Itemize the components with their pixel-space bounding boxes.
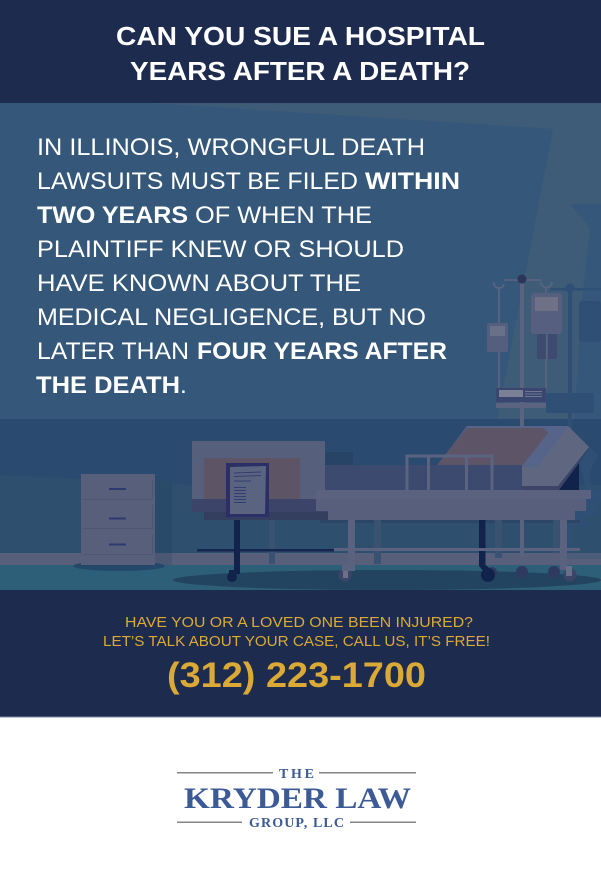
body text: LATER THAN [37, 338, 189, 365]
body text: THE DEATH [36, 372, 180, 399]
body text: . [180, 372, 187, 399]
body text: OF WHEN THE [195, 202, 372, 229]
clipboard stand [197, 463, 334, 582]
title banner: CAN YOU SUE A HOSPITAL [116, 21, 485, 51]
call to action band: LET’S TALK ABOUT YOUR CASE, CALL US, IT’S FREE! [103, 634, 490, 650]
phone number: (312) 223-1700 [167, 656, 426, 695]
logo: GROUP, LLC [249, 816, 344, 831]
bedside monitor [192, 441, 353, 564]
background IV stand [546, 284, 601, 559]
body text [36, 134, 460, 399]
logo [177, 767, 416, 831]
hospital room illustration [0, 103, 601, 590]
logo: KRYDER LAW [184, 782, 411, 815]
body text: HAVE KNOWN ABOUT THE [37, 270, 361, 297]
title banner [0, 0, 601, 103]
IV stand and infusion pump [487, 274, 562, 426]
body text: TWO YEARS [37, 202, 188, 229]
body text: FOUR YEARS AFTER [197, 338, 447, 365]
call to action band: HAVE YOU OR A LOVED ONE BEEN INJURED? [125, 615, 473, 631]
body text: WITHIN [365, 168, 460, 195]
hospital bed [316, 426, 591, 582]
logo: THE [279, 767, 314, 782]
body text: IN ILLINOIS, WRONGFUL DEATH [37, 134, 425, 161]
call to action band [0, 590, 601, 718]
title banner: YEARS AFTER A DEATH? [130, 56, 470, 86]
filing cabinet [73, 474, 172, 571]
body text: PLAINTIFF KNEW OR SHOULD [37, 236, 404, 263]
room wall background [0, 103, 601, 590]
body text: MEDICAL NEGLIGENCE, BUT NO [37, 304, 426, 331]
body text: LAWSUITS MUST BE FILED [37, 168, 358, 195]
